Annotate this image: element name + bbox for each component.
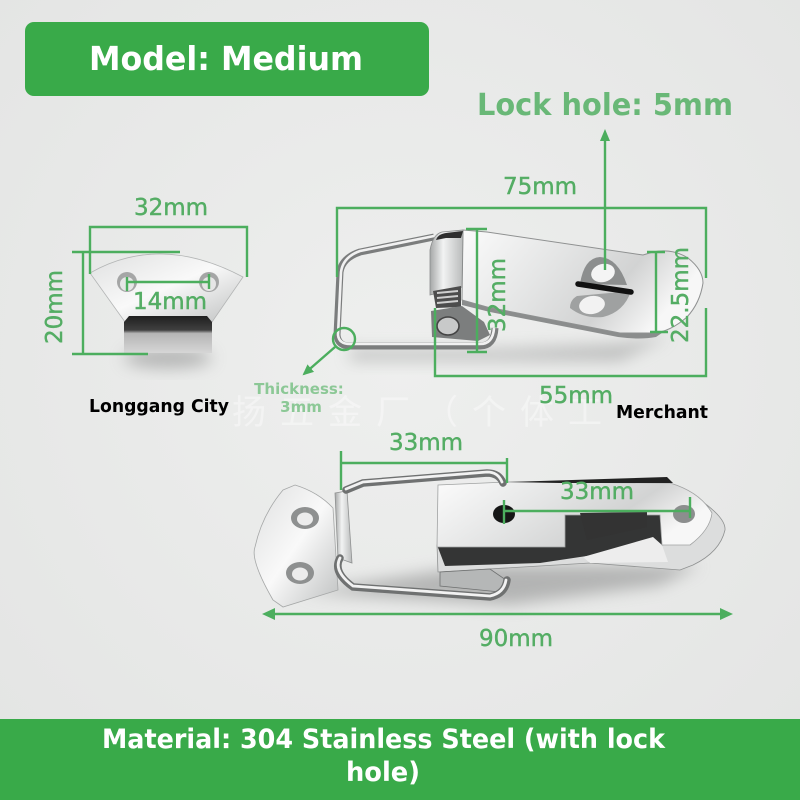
plate holes: [286, 507, 319, 584]
top latch: side view with dimensions: [304, 129, 706, 409]
front clasp: [440, 569, 506, 592]
lock hole leader line: [604, 136, 606, 270]
header banner: model: Model: Medium: [89, 39, 363, 78]
hasp shadow: [124, 348, 212, 368]
hasp dimension labels: [42, 195, 208, 344]
top latch shadow: [350, 335, 670, 360]
top body plate: [437, 482, 712, 547]
latch lower edge: [462, 296, 672, 338]
bottom latch dimension lines: [341, 451, 690, 524]
top latch dimension labels: 22.5mm: [668, 247, 694, 343]
slot hasp in body: [570, 257, 631, 317]
label: lock hole size: Lock hole: 5mm: [477, 88, 733, 123]
bottom latch: top view with dimensions: [254, 430, 733, 652]
thickness callout circle: [333, 328, 355, 350]
left hasp plate: [254, 485, 338, 607]
footer banner: material: [0, 719, 800, 800]
watermark: 扬五金厂（个体工: [232, 394, 616, 432]
hinge dark edge: [436, 231, 463, 240]
hasp dimension labels: 14mm: [133, 289, 207, 315]
body holes: [493, 505, 695, 523]
top latch dimension labels: [485, 174, 694, 409]
header banner: model: [25, 22, 429, 96]
plate fold: [335, 491, 352, 563]
bottom latch shadow: [300, 565, 700, 605]
bottom latch dimension labels: 33mm: [560, 479, 634, 505]
thickness label: Thickness:: [254, 380, 344, 398]
footer banner: material: hole): [346, 757, 420, 788]
top dark edge: [507, 477, 673, 483]
bottom latch dimension labels: 90mm: [479, 626, 553, 652]
wire loop: [337, 237, 495, 346]
thickness label: [254, 380, 344, 416]
bottom latch dimension labels: 33mm: [389, 430, 463, 456]
hasp dimension lines: [72, 227, 247, 354]
hasp plate: [90, 254, 243, 322]
hasp dimension labels: 32mm: [134, 195, 208, 221]
spring coil: [433, 286, 461, 308]
small hasp staple with dimensions: [42, 195, 247, 368]
bottom wire loop: [338, 473, 507, 597]
thickness arrow: [304, 347, 335, 374]
top latch dimension labels: 55mm: [539, 383, 613, 409]
footer banner: material: Material: 304 Stainless Steel (with lock: [102, 724, 666, 755]
thickness label: 3mm: [280, 398, 322, 416]
hasp dimension labels: 20mm: [42, 270, 68, 344]
top latch dimension labels: 75mm: [503, 174, 577, 200]
top latch dimension lines: [337, 208, 706, 376]
90mm arrow: [262, 608, 733, 620]
pivot bracket and rivet: [431, 306, 490, 341]
latch body plate: [462, 230, 703, 333]
lock hole arrowhead: [600, 129, 610, 141]
lower body plate: [437, 500, 725, 572]
bottom latch dimension labels: [389, 430, 634, 652]
top latch dimension labels: 32mm: [485, 258, 511, 332]
spring: [580, 512, 647, 540]
hasp folded tab: [124, 316, 212, 353]
label: Longgang City: Longgang City: [89, 397, 230, 417]
highlight inside cavity: [583, 537, 668, 563]
hinge barrel: [430, 230, 463, 295]
label: Merchant: Merchant: [616, 403, 708, 423]
hasp mounting holes: [117, 272, 219, 292]
dark inner cavity: [437, 515, 664, 566]
